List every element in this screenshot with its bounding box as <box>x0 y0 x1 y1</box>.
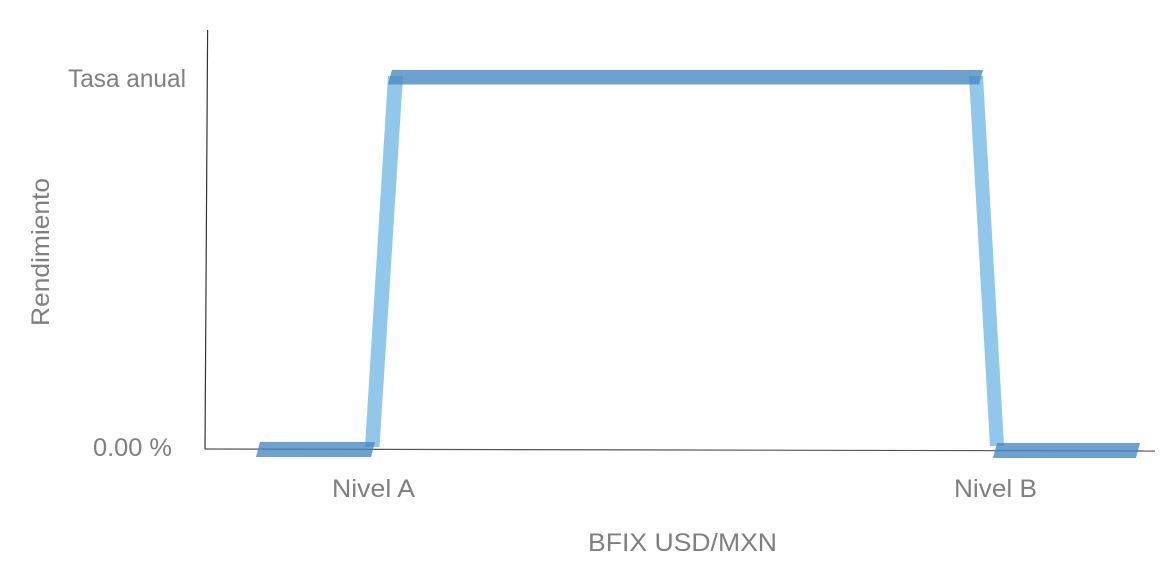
y label: zero: 0.00 % <box>93 434 172 462</box>
left riser <box>365 76 403 447</box>
top segment <box>388 70 983 84</box>
bottom right segment <box>993 443 1140 458</box>
payoff line <box>256 70 1140 458</box>
x label: level A: Nivel A <box>332 475 415 503</box>
bottom left segment <box>256 442 375 457</box>
x axis title: BFIX USD/MXN <box>588 529 777 557</box>
right riser <box>969 76 1004 446</box>
y label: annual rate: Tasa anual <box>68 65 186 93</box>
x label: level B: Nivel B <box>954 475 1037 503</box>
axes <box>205 30 1155 451</box>
y axis title: Rendimiento <box>27 178 55 326</box>
